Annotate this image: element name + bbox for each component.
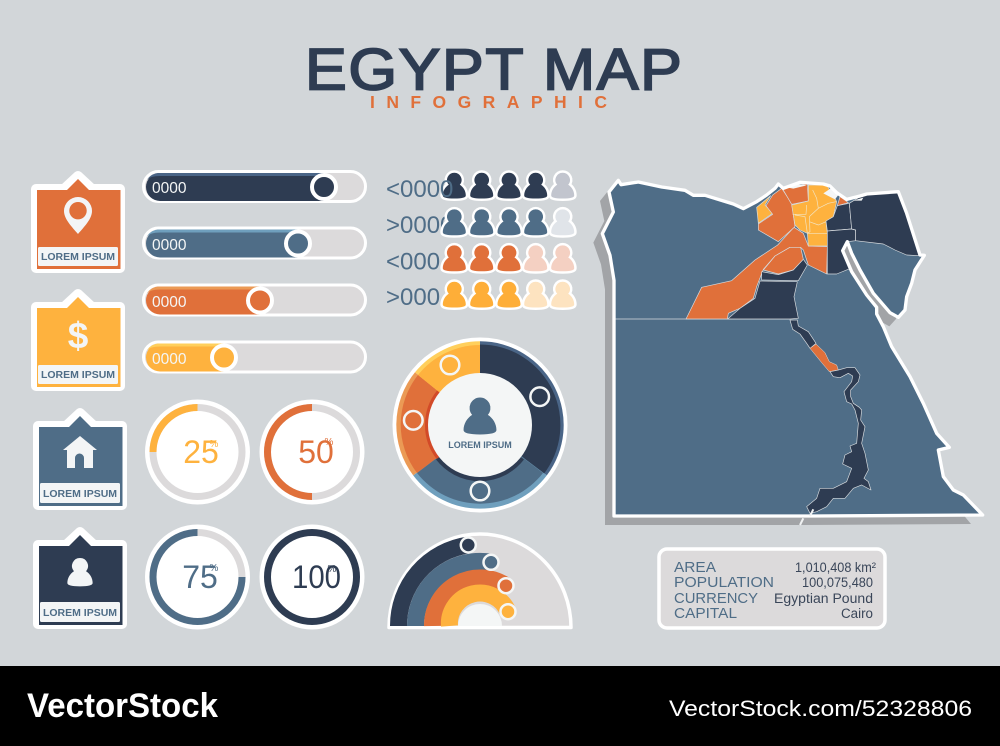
footer band — [0, 666, 1000, 746]
progress bar 3 — [144, 285, 366, 315]
gauge 50 percent: % — [325, 437, 334, 448]
info box — [659, 549, 885, 628]
row 3 — [386, 245, 574, 276]
info values: 1,010,408 km² — [795, 560, 876, 575]
icon: map pin — [64, 197, 92, 234]
info labels: CURRENCY — [674, 591, 758, 607]
badge: location — [36, 176, 120, 269]
info labels: POPULATION — [674, 575, 774, 591]
progress bar 4: 0000 — [152, 351, 187, 368]
row 1 — [386, 173, 574, 203]
donut chart — [392, 338, 568, 512]
gauge 25 percent: % — [210, 439, 219, 450]
Beni Suef region — [762, 259, 807, 281]
row 2: >0000 — [386, 212, 453, 239]
badge: person — [38, 532, 122, 625]
delta coast lakes — [787, 184, 863, 201]
footer logo: VectorStock — [27, 687, 218, 725]
badge: money — [36, 294, 120, 387]
gauge 100 percent: % — [328, 564, 337, 575]
gauge 50 percent: 50 — [298, 434, 334, 470]
info values: Cairo — [841, 606, 873, 621]
map shadow — [593, 189, 971, 525]
gauge 100 percent: 100 — [292, 559, 341, 595]
Nile mouth notch — [800, 509, 813, 525]
badge label: LOREM IPSUM — [41, 369, 115, 381]
North Sinai region — [849, 192, 919, 256]
row 1: <0000 — [386, 176, 453, 203]
Luxor region — [810, 344, 838, 372]
info values — [774, 560, 876, 621]
footer url: VectorStock.com/52328806 — [669, 696, 972, 721]
Suez region — [827, 229, 856, 274]
info labels: AREA — [674, 560, 716, 576]
Nile and Lake Nasser — [807, 368, 871, 513]
region divider — [615, 318, 790, 320]
badge: home — [38, 413, 122, 506]
badge label: LOREM IPSUM — [43, 488, 117, 500]
Beheira region — [758, 188, 795, 242]
info labels: CAPITAL — [674, 606, 737, 622]
donut label: LOREM IPSUM — [448, 440, 512, 450]
Giza region — [686, 227, 827, 319]
progress bar 1 — [144, 172, 366, 202]
icon: person — [67, 558, 93, 586]
country outline — [602, 180, 983, 516]
row 3: <000 — [386, 248, 440, 276]
progress bar 1: 0000 — [152, 180, 187, 197]
Fayoum region — [763, 247, 803, 274]
row 2 — [386, 209, 574, 239]
subtitle: INFOGRAPHIC — [370, 92, 607, 112]
badge label: LOREM IPSUM — [41, 251, 115, 263]
map of Egypt — [593, 180, 983, 525]
progress bar 3: 0000 — [152, 294, 187, 311]
info values: Egyptian Pound — [774, 591, 873, 606]
gauge 75 percent: % — [210, 563, 219, 574]
info labels — [674, 560, 774, 622]
progress bar 4 — [144, 342, 366, 372]
gauge 75 percent — [145, 524, 250, 630]
Matrouh coastal yellow region — [757, 196, 773, 223]
small coastal region — [837, 197, 848, 206]
upper Nile — [790, 320, 816, 348]
progress bar 2 — [144, 228, 366, 258]
row 4 — [386, 282, 574, 311]
title: EGYPT MAP — [305, 37, 682, 102]
pictogram rows — [386, 173, 574, 311]
gauge 75 percent: 75 — [182, 559, 218, 595]
icon: person — [464, 398, 496, 434]
country base — [602, 180, 983, 516]
progress bar 2: 0000 — [152, 237, 187, 254]
badge label: LOREM IPSUM — [43, 607, 117, 619]
gauge 100 percent — [260, 524, 364, 630]
info values: 100,075,480 — [802, 575, 873, 590]
icon: dollar: $ — [68, 315, 89, 356]
icon: house — [63, 436, 97, 468]
row 4: >000 — [386, 284, 440, 311]
gauge 25 percent: 25 — [183, 434, 219, 470]
Sharqia region — [826, 203, 852, 231]
gauge 25 percent — [145, 400, 250, 504]
gauge 50 percent — [260, 400, 364, 504]
central delta — [792, 185, 837, 246]
Kafr region — [782, 184, 808, 204]
Minya region — [728, 281, 798, 319]
semicircle chart — [389, 534, 571, 628]
